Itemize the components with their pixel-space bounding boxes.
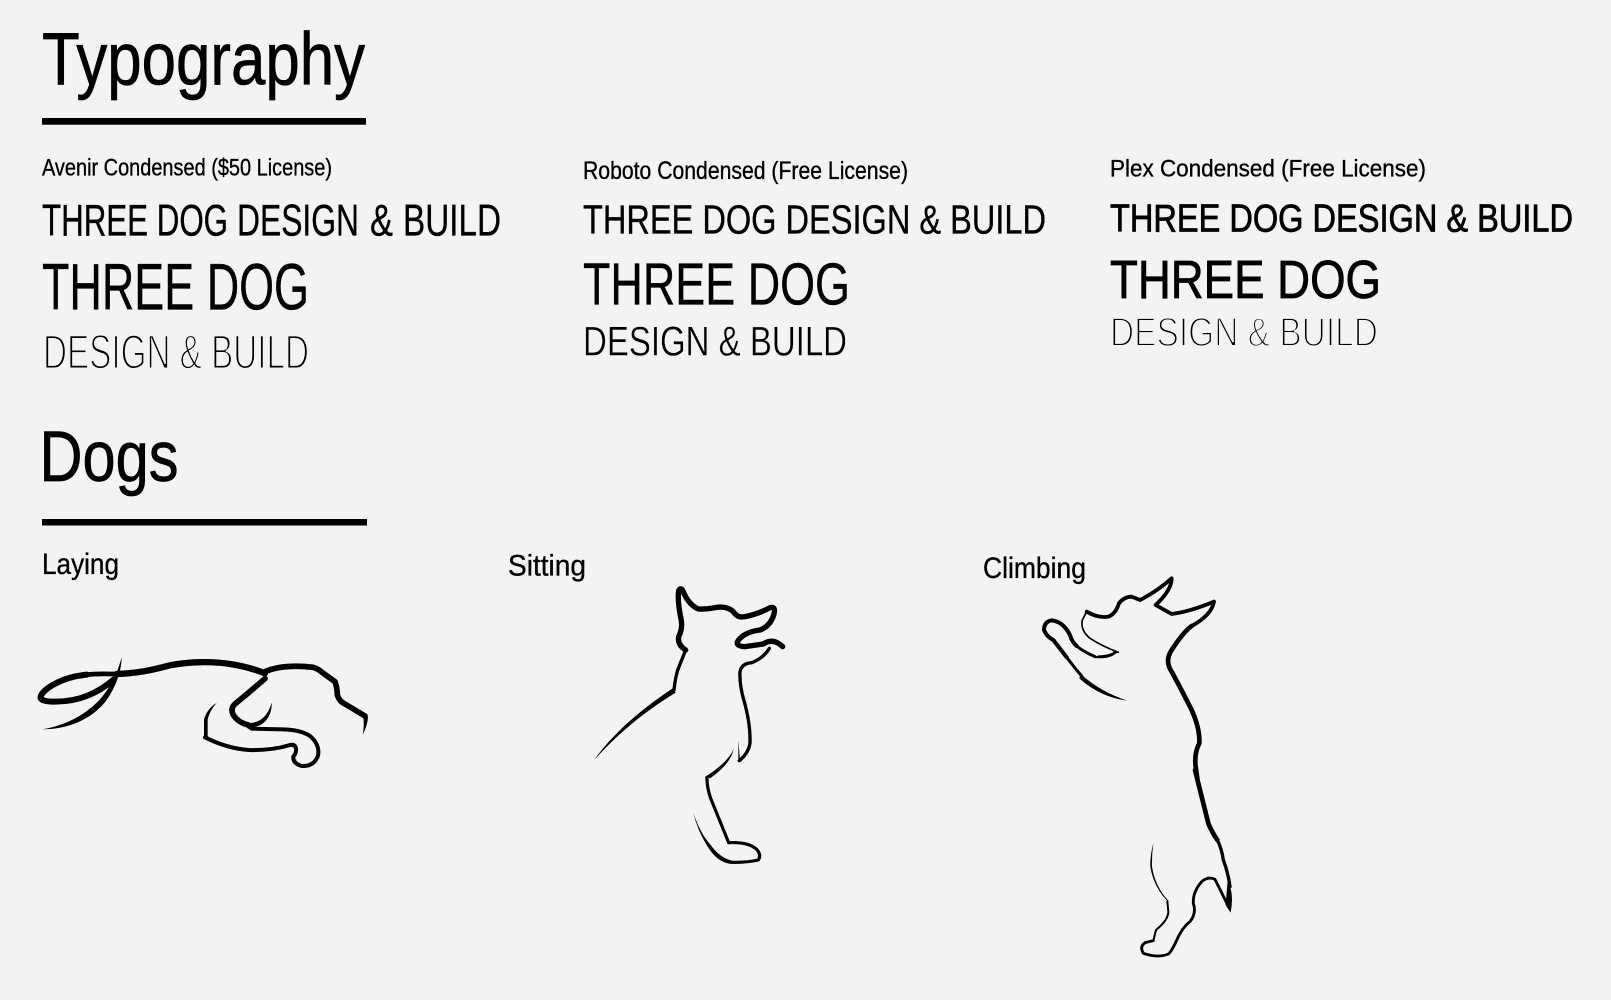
illustration: sitting dog bbox=[594, 589, 783, 864]
column: Roboto Condensed bbox=[583, 157, 1046, 364]
label: Roboto: Roboto Condensed (Free License) bbox=[583, 157, 908, 185]
sample: full name: THREE DOG DESIGN & BUILD bbox=[583, 196, 1046, 242]
label: Avenir: Avenir Condensed ($50 License) bbox=[42, 154, 332, 182]
panel: typography bbox=[42, 18, 1573, 380]
sample: three dog: THREE DOG bbox=[583, 252, 850, 318]
label: Plex: Plex Condensed (Free License) bbox=[1110, 156, 1426, 182]
sample: full name: & bbox=[370, 197, 393, 246]
sample: design and build: DESIGN & BUILD bbox=[583, 318, 847, 364]
illustration: climbing dog lower body bbox=[1142, 770, 1232, 956]
column: Plex Condensed bbox=[1110, 156, 1573, 355]
label: Laying: Laying bbox=[42, 548, 119, 581]
heading rule bbox=[42, 519, 367, 526]
illustration: climbing dog upper body bbox=[1044, 578, 1214, 778]
sample: full name bbox=[42, 197, 501, 246]
column: Avenir Condensed bbox=[42, 154, 501, 380]
heading: Dogs: Dogs bbox=[40, 418, 178, 497]
sample: design and build light: DESIGN & BUILD bbox=[1110, 309, 1378, 355]
sample: full name: THREE DOG bbox=[42, 197, 228, 246]
sample: design and build light: DESIGN & BUILD bbox=[43, 326, 309, 380]
heading rule bbox=[42, 118, 366, 125]
sample: three dog: THREE DOG bbox=[1110, 250, 1381, 310]
illustration: laying dog bbox=[41, 657, 368, 766]
sample: full name: DESIGN bbox=[237, 197, 359, 246]
heading: Typography: Typography bbox=[42, 18, 365, 100]
label: Climbing: Climbing bbox=[983, 552, 1086, 585]
sample: three dog: THREE DOG bbox=[42, 250, 309, 324]
panel: dogs bbox=[40, 418, 1232, 956]
label: Sitting: Sitting bbox=[508, 550, 586, 582]
sample: full name: BUILD bbox=[403, 197, 501, 246]
